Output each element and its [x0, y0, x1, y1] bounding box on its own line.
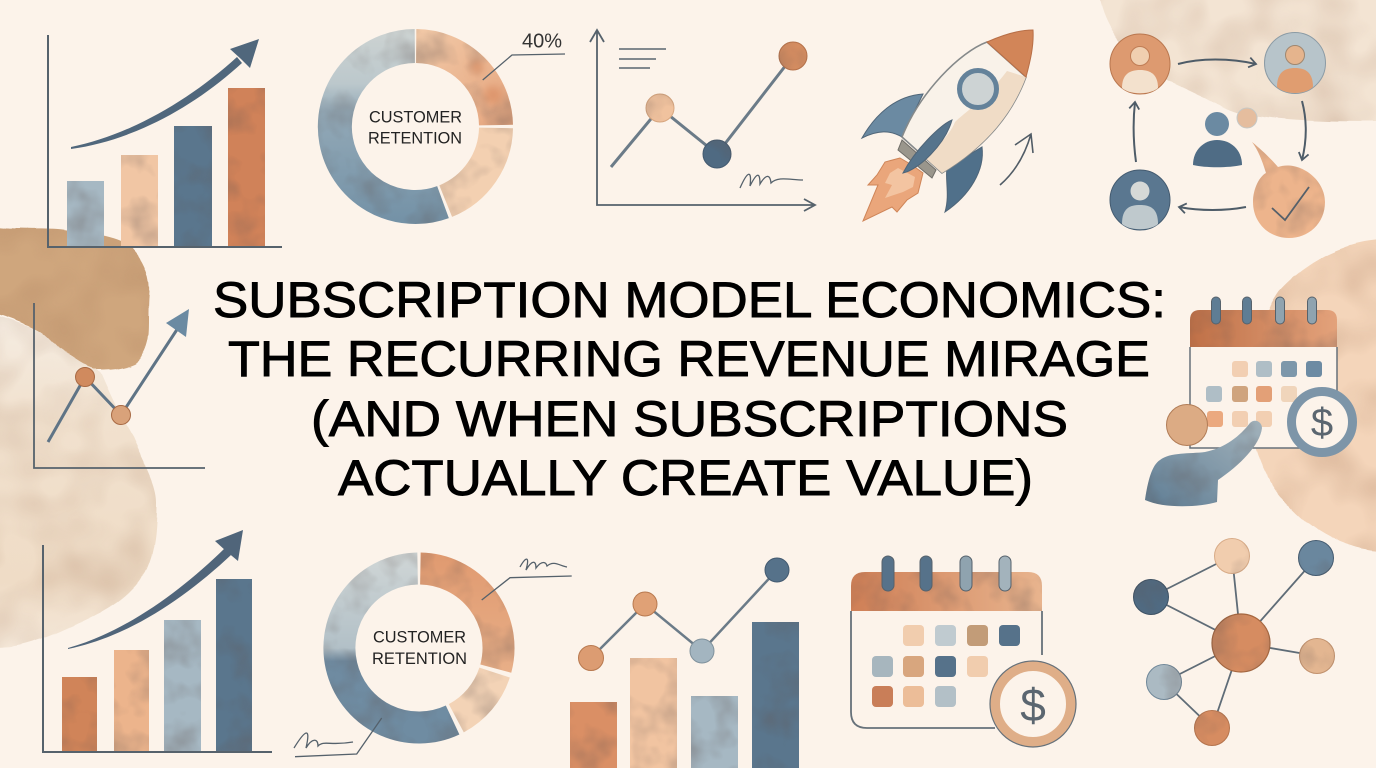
- chart: small line with arrow, left: [34, 303, 205, 468]
- segment: blue: [335, 46, 443, 207]
- axes: [590, 30, 815, 211]
- flame: [863, 158, 923, 221]
- loop arrows: [1134, 60, 1306, 210]
- callout: scribble bottom: [294, 718, 382, 757]
- donut chart: customer retention, top: [335, 30, 565, 207]
- watercolor wash: right peach: [1250, 240, 1376, 552]
- nozzle: [898, 140, 936, 178]
- line series: [48, 328, 178, 442]
- dollar coin: $: [1311, 401, 1333, 445]
- title: (AND WHEN SUBSCRIPTIONS: [311, 391, 1068, 447]
- bars: [67, 88, 265, 246]
- calendar page: [1190, 347, 1337, 448]
- donut label: CUSTOMER: [369, 107, 462, 126]
- calendar header: [851, 572, 1042, 611]
- line series: [591, 570, 777, 658]
- body shade: [922, 71, 1026, 173]
- donut label: CUSTOMER: [373, 628, 466, 647]
- segment: blue: [339, 568, 453, 727]
- donut label: RETENTION: [368, 128, 462, 147]
- callout: 40%: [483, 30, 565, 80]
- title: SUBSCRIPTION MODEL ECONOMICS:: [213, 272, 1166, 328]
- title: [213, 272, 1166, 506]
- links: [1151, 556, 1317, 728]
- date squares: [1206, 361, 1322, 427]
- dollar coin: $: [1020, 679, 1046, 731]
- body: [902, 42, 1026, 173]
- motion arrow: [1000, 134, 1033, 185]
- callout: scribble top: [482, 559, 572, 600]
- hub node: [1212, 614, 1270, 672]
- bars: [570, 622, 799, 768]
- markers: [646, 42, 807, 168]
- centre people: [1193, 108, 1257, 167]
- flame inner: [885, 168, 915, 198]
- donut label: RETENTION: [372, 649, 467, 668]
- dollar coin: [990, 661, 1076, 747]
- diagram: network hub, bottom right: [1134, 538, 1334, 746]
- binder rings: [1212, 297, 1316, 324]
- window: [960, 70, 996, 108]
- node: dark user: [1110, 170, 1170, 230]
- chart: bars with line, bottom centre: [570, 558, 799, 768]
- lower fin: [945, 147, 982, 212]
- segment: orange: [420, 568, 499, 669]
- node: speech bubble with check: [1252, 142, 1325, 238]
- axes: [43, 545, 272, 752]
- segment: peach: [446, 128, 496, 201]
- segment: peach: [456, 673, 495, 718]
- icon: calendar with coin, bottom: [851, 556, 1076, 747]
- node: grey user: [1264, 32, 1326, 94]
- donut chart: customer retention, bottom: [294, 559, 572, 757]
- chart: rising bars with arrow, bottom left: [43, 530, 272, 752]
- title: ACTUALLY CREATE VALUE): [338, 450, 1033, 506]
- donut label: [372, 628, 467, 668]
- watercolor wash: left brown: [0, 227, 150, 368]
- binder rings: [882, 556, 1011, 591]
- orange segment wash spots: [470, 60, 502, 104]
- calendar page: [851, 611, 1042, 728]
- arrow head: [166, 309, 189, 337]
- centre fin: [903, 120, 952, 173]
- date squares: [872, 625, 1020, 707]
- line series: [611, 56, 793, 167]
- nose cone: [987, 30, 1033, 77]
- bars: [62, 579, 252, 751]
- arrow: [71, 39, 259, 149]
- person arm and body: [1145, 421, 1262, 506]
- legend strokes: [619, 49, 666, 68]
- icon: rocket: [862, 30, 1033, 221]
- title: THE RECURRING REVENUE MIRAGE: [228, 331, 1150, 387]
- axes: [34, 303, 205, 468]
- axes: [48, 35, 282, 247]
- icon: calendar with person and coin, right: [1145, 297, 1352, 506]
- chart: line with markers, top centre: [590, 30, 815, 211]
- markers: [578, 558, 789, 670]
- outer nodes: [1134, 538, 1334, 746]
- watercolor wash: left pale: [0, 312, 157, 648]
- dollar coin: [1292, 392, 1352, 452]
- diagram: customer loop, top right: [1110, 32, 1326, 238]
- arrow: [68, 530, 243, 649]
- chart: rising bars with arrow, top left: [48, 35, 282, 247]
- markers: [76, 368, 130, 424]
- watercolor wash: top right: [1098, 0, 1376, 122]
- segment: orange: [416, 46, 496, 125]
- left fin: [862, 94, 923, 138]
- person head: [1166, 404, 1208, 446]
- callout: 40%: 40%: [522, 30, 562, 52]
- calendar header: [1190, 310, 1337, 347]
- donut label: [368, 107, 462, 147]
- signature scribble: [740, 174, 803, 188]
- node: orange user: [1110, 34, 1170, 94]
